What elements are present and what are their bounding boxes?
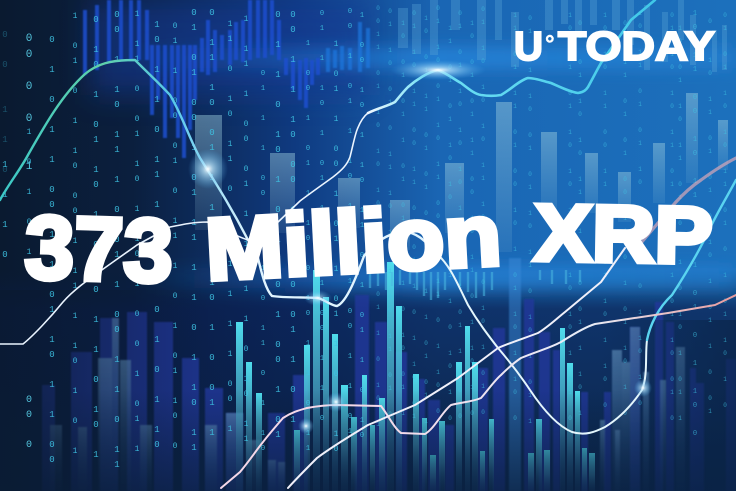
binary digit columns: 00 1 10 11 1 0 01 1 00 1 1 0 11 (112, 10, 122, 475)
logo: U.Today: TODAY (558, 23, 715, 69)
lower indigo bars (42, 295, 736, 491)
curve: teal rise to top right (647, 180, 736, 340)
binary digit columns: 1 00 1 01 1 10 0 10 1 1 0 11 (304, 40, 312, 460)
translucent column bars (195, 93, 728, 252)
binary digit columns: 0 10 1 01 10 1 01 0 1 1 0 10 1 (91, 15, 101, 465)
binary digit columns: 01 1 10 1 01 10 0 1 00 1 1 0 (318, 10, 326, 430)
logo: U.Today: U (514, 23, 543, 69)
infographic canvas: 11 01 11 01 00 10 1 01 10 1 10 0 (512, 12, 518, 428)
binary digit columns: 00 0 0 1 (23, 33, 35, 177)
infographic canvas: 0011 01 10 10 10 01 1 01 1 0 10 1 (374, 5, 382, 434)
binary digit columns: 10 1 1 0 11 1 0 11 0 1 0 1 10 (152, 20, 162, 455)
binary digit columns: 0 1 0 1 1 00 1 1 01 10 1 1 00 (47, 35, 57, 470)
curve: white to teal upper line (0, 113, 368, 344)
binary digit columns: 1 1 1 0 (0, 160, 10, 265)
lower cyan bars (236, 262, 595, 491)
title: 373 Million XRP: XRP (534, 188, 713, 280)
infographic canvas: 10 10 11 00 11 0 1 01 10 1 10 0 (602, 12, 608, 415)
binary digit columns: 1 11 1 00 01 1 11 1 1 0 10 11 (242, 15, 250, 450)
curve: white rising line (288, 248, 625, 488)
binary digit columns: 1 00 10 1 10 11 0 1 01 1 0 10 (358, 12, 366, 447)
upper blue bar chart (85, 0, 318, 158)
title: 373 Million XRP: 373 (23, 198, 174, 302)
infographic canvas: 01 01 10 10 11 01 0 1 01 10 1 0 (722, 12, 728, 415)
infographic canvas: 10 11 01 01 10 11 01 0 1 10 1 0 (636, 10, 644, 413)
infographic canvas: 11 01 01 10 10 01 01 1 0 10 1 0 (446, 25, 454, 428)
binary digit columns: 1 11 0 01 10 1 10 1 0 0 1 01 1 (132, 10, 142, 460)
curve: pink lower line (221, 295, 736, 488)
infographic canvas: 01 01 10 01 01 10 11 0 10 1 01 1 (526, 15, 534, 431)
infographic canvas: 10 01 11 01 01 01 00 1 1 01 01 1 (422, 15, 430, 431)
binary digit columns: 0 1 1 0 10 1 0 11 0 1 00 1 01 (273, 10, 283, 445)
infographic canvas: 01 10 10 11 01 0 10 1 01 10 01 0 (668, 12, 676, 428)
binary digit columns: 01 1 1 00 11 1 0 11 0 1 10 (259, 70, 267, 460)
binary digit columns (0, 8, 366, 475)
infographic canvas: 10 11 01 10 10 1 01 10 10 1 01 0 (566, 12, 574, 428)
upper right pale bars (398, 0, 727, 72)
logo: U.Today: ° (545, 31, 555, 58)
infographic canvas: 01 10 10 10 11 10 11 0 10 1 01 0 (480, 6, 486, 422)
curve: hump into dip and teal rise (0, 60, 437, 306)
binary digit columns: 01 1 00 01 0 11 1 0 1 01 10 0 (170, 22, 180, 457)
curve: pink fading right segment (641, 158, 736, 243)
infographic canvas: 10 01 10 11 01 01 1 0 10 1 01 1 (676, 25, 684, 428)
binary digit columns: 1 01 1 00 1 01 1 01 1 0 1 10 (332, 40, 340, 460)
lower steel bars (50, 318, 685, 491)
infographic canvas: 01 01 10 10 10 11 00 1 01 1 10 0 (456, 10, 464, 426)
binary digit columns: 11 0 10 11 0 1 01 1 1 1 00 1 (226, 20, 234, 440)
infographic canvas: 01 10 01 0 11 10 10 1 00 11 01 0 (386, 8, 394, 424)
binary digit columns: 0 11 10 01 1 11 1 10 1 0 01 1 (207, 8, 217, 443)
binary digit columns: 00 0 (24, 395, 34, 455)
title: 373 Million XRP: Million (203, 185, 504, 299)
curve: second half of dip (437, 254, 647, 434)
binary digit columns: 1 0 1 0 11 (24, 128, 34, 278)
binary digit columns: 01 01 00 1 01 11 1 1 0 1 10 11 (189, 8, 199, 458)
infographic canvas: 10 01 01 11 00 10 11 0 1 10 1 0 (468, 20, 476, 423)
infographic canvas: 00 11 01 01 00 11 0 1 01 10 1 0 (622, 20, 628, 423)
infographic canvas: 10 01 01 1 01 01 10 1 0 10 01 1 (400, 20, 406, 423)
glowing blue column (509, 258, 521, 491)
logo: U.Today (514, 23, 715, 69)
title: 373 Million XRP (23, 185, 713, 302)
infographic canvas: 10 11 00 10 11 11 1 01 0 1 10 0 (691, 10, 699, 444)
infographic canvas: 01 10 11 01 01 0 10 1 01 1 0 01 (706, 18, 714, 421)
infographic canvas: 01 10 01 10 11 00 10 11 0 1 10 0 (434, 5, 442, 421)
binary digit columns: 1 01 0 1 10 00 1 11 1 10 1 0 1 (70, 12, 80, 462)
binary digit columns: 0 0 1 1 0 (0, 30, 10, 180)
mid band spikes (370, 270, 580, 300)
binary digit columns: 00 1 1 10 00 1 11 0 01 1 0 1 (288, 10, 298, 430)
infographic canvas: 01 01 10 10 11 01 1 0 01 1 10 1 (576, 20, 584, 423)
lower fade overlays (0, 290, 736, 491)
sparkles (188, 60, 652, 434)
infographic canvas: 01 10 11 00 11 01 01 1 0 1 10 01 (410, 10, 418, 426)
binary digit columns: 00 1 01 1 10 1 10 1 00 1 1 01 (346, 8, 354, 443)
